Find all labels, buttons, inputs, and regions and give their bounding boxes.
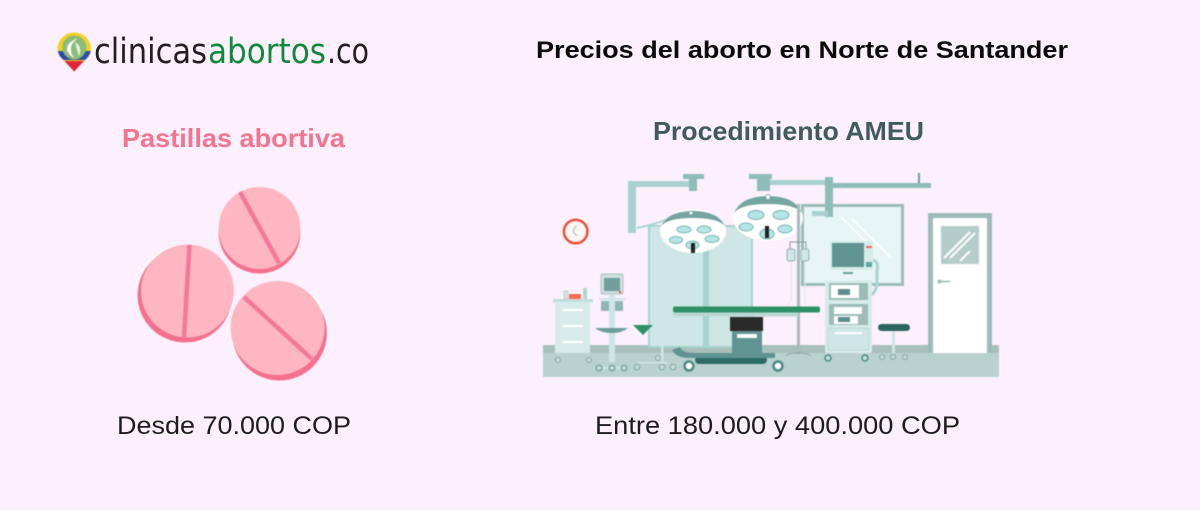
- pill: left: [136, 244, 234, 342]
- door: [928, 213, 992, 353]
- pill: top right: [217, 187, 302, 274]
- title: Precios del aborto en Norte de Santander: [536, 37, 1069, 64]
- ceiling rail: [749, 173, 931, 217]
- price: pills: Desde 70.000 COP: [117, 412, 351, 440]
- icon: map pin: [58, 32, 91, 72]
- logo: [58, 32, 369, 72]
- screen partition: [649, 226, 752, 347]
- logo: abortos: [208, 32, 326, 72]
- stool: [878, 324, 910, 360]
- surgical lamp: left: [660, 209, 726, 253]
- left lamp arm: [628, 174, 704, 233]
- price: AMEU procedure: Entre 180.000 y 400.000 COP: [595, 412, 960, 440]
- floor: [543, 345, 999, 377]
- monitor stand: [595, 274, 628, 371]
- logo wordmark: clinicas: [94, 32, 207, 72]
- operating table: [672, 306, 820, 370]
- heading: pastillas abortiva: Pastillas abortiva: [122, 123, 346, 153]
- IV stand: [786, 204, 811, 356]
- medicine cabinet: [553, 288, 593, 362]
- icon: pills: [136, 187, 328, 380]
- logo: .co: [327, 32, 369, 72]
- heading: procedimiento AMEU: Procedimiento AMEU: [653, 116, 924, 146]
- instrument tray: [633, 324, 676, 370]
- surgical lamp: right: [733, 194, 803, 241]
- illustration: operating room: [543, 173, 999, 377]
- pill: bottom right: [230, 281, 328, 380]
- anesthesia machine: [825, 241, 878, 361]
- window: [802, 206, 902, 284]
- clock: [562, 218, 590, 246]
